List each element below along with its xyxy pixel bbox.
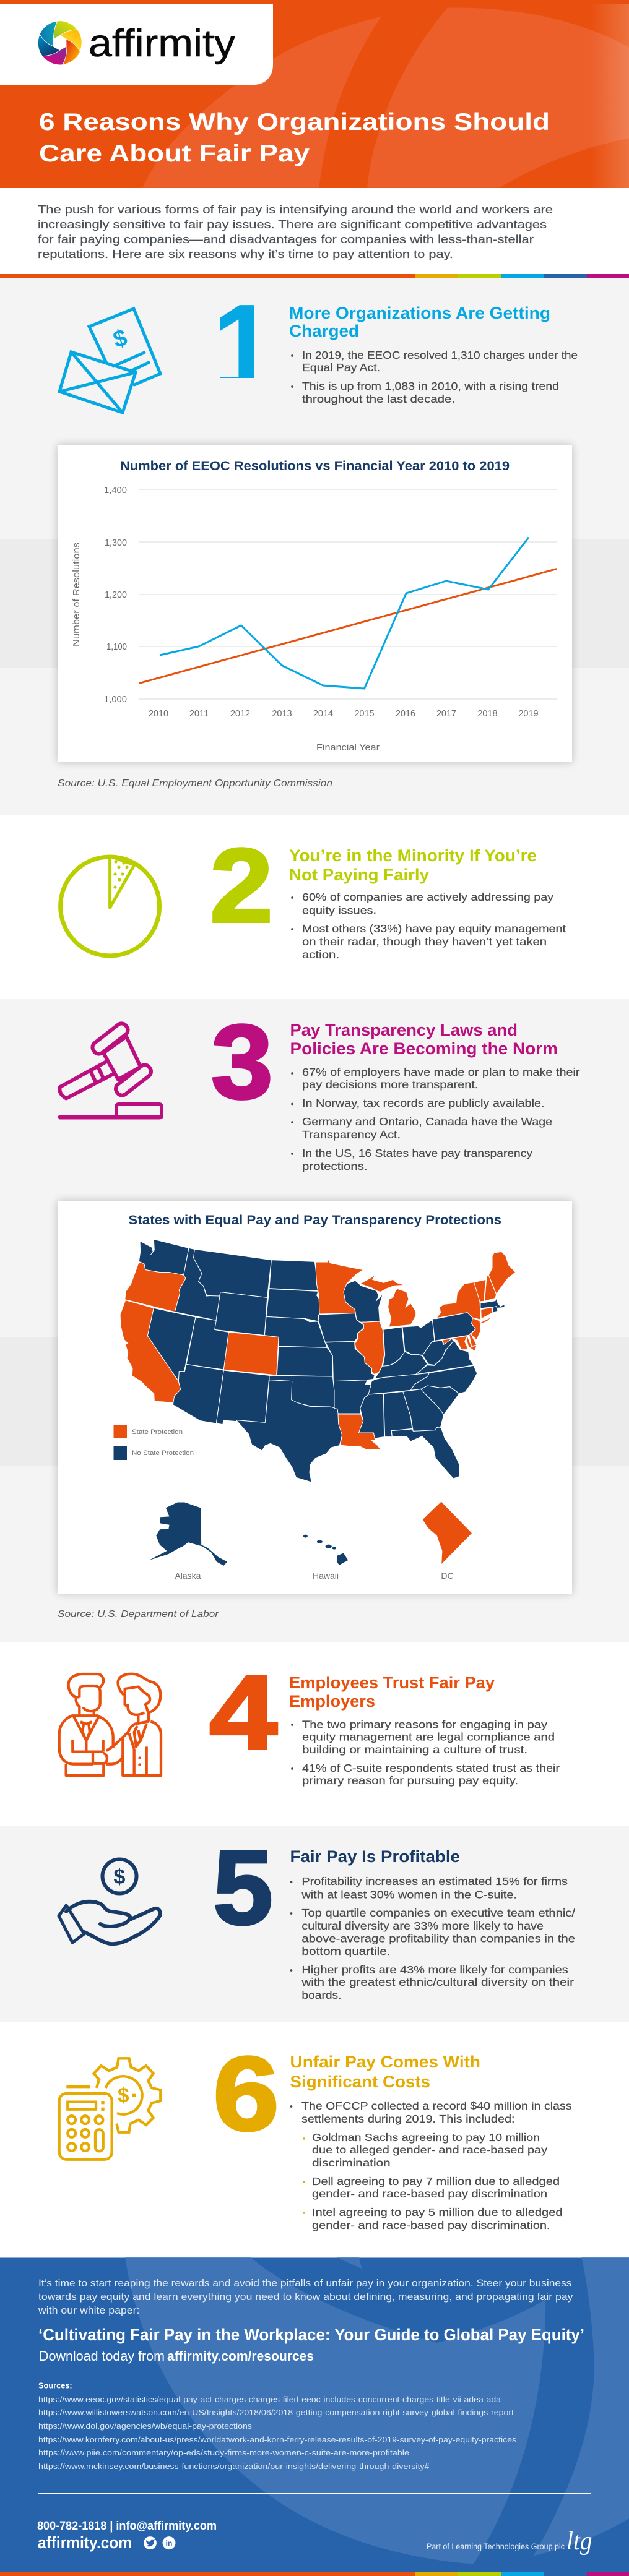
source note: Source: U.S. Department of Labor xyxy=(58,1609,219,1620)
gridlines and axes labels xyxy=(72,486,557,753)
bullet list: boards. xyxy=(301,1989,342,2001)
bullet list: 67% of employers have made or plan to make their xyxy=(302,1066,580,1078)
sources list xyxy=(38,2381,517,2471)
bullet list: 41% of C-suite respondents stated trust as their xyxy=(302,1762,560,1774)
intro text: reputations. Here are six reasons why it’s time to pay attention to pay. xyxy=(38,248,453,260)
bullet list: with the greatest ethnic/cultural diversity on their xyxy=(301,1976,574,1988)
sources list: https://www.dol.gov/agencies/wb/equal-pay-protections xyxy=(38,2421,253,2431)
icon: linkedin: in xyxy=(166,2539,172,2548)
icon: linkedin xyxy=(162,2536,176,2549)
bullet list: discrimination xyxy=(312,2157,391,2169)
bullet list: pay decisions more transparent. xyxy=(302,1078,478,1091)
colour stripe xyxy=(0,274,629,278)
sources list: Sources: xyxy=(38,2381,72,2390)
bullet list: In Norway, tax records are publicly available. xyxy=(302,1097,545,1109)
LTG credit: ltg xyxy=(566,2527,592,2556)
bullet list: bottom quartile. xyxy=(301,1945,391,1957)
download line xyxy=(39,2348,314,2364)
heading: Significant Costs xyxy=(290,2072,430,2091)
bullet list: gender- and race-based pay discrimination xyxy=(312,2187,547,2200)
logo card xyxy=(0,4,273,85)
bullet list: Top quartile companies on executive team ethnic/ xyxy=(301,1907,575,1919)
gridlines and axes labels: 1,300 xyxy=(105,538,127,548)
gridlines and axes labels: 2018 xyxy=(477,709,498,719)
intro text: increasingly sensitive to fair pay issues. There are significant competitive advantages xyxy=(38,218,547,231)
heading: You’re in the Minority If You’re xyxy=(289,846,537,865)
panel: reason 5 xyxy=(59,1829,575,2001)
map: Hawaii: Hawaii xyxy=(313,1571,339,1581)
map legend: No State Protection xyxy=(132,1449,194,1457)
bullet list: above-average profitability than companies in the xyxy=(301,1933,575,1945)
bullet list: Most others (33%) have pay equity management xyxy=(302,922,566,935)
gridlines and axes labels: 2010 xyxy=(149,709,168,719)
icon: envelope and dollar bill: $ xyxy=(111,325,130,353)
bullet list: equity issues. xyxy=(302,904,376,917)
map title: States with Equal Pay and Pay Transparency Protections xyxy=(129,1213,501,1227)
icon: gavel xyxy=(59,1021,162,1117)
map panel xyxy=(58,1201,572,1594)
gridlines and axes labels: 2013 xyxy=(272,709,292,719)
heading: Not Paying Fairly xyxy=(289,865,429,884)
heading xyxy=(289,304,550,340)
sources list: https://www.eeoc.gov/statistics/equal-pay-act-charges-charges-filed-eeoc-includes-concurrent-charges-title-vii-adea-ada xyxy=(38,2395,501,2404)
bullet list: The OFCCP collected a record $40 million in class xyxy=(301,2100,572,2112)
number 3: 3 xyxy=(211,1003,273,1121)
gridlines and axes labels: 1,200 xyxy=(105,590,127,600)
map: Alaska xyxy=(149,1502,227,1581)
download line: affirmity.com/resources xyxy=(167,2348,314,2364)
bullet list: primary reason for pursuing pay equity. xyxy=(302,1774,518,1787)
line chart panel xyxy=(58,445,572,762)
bullet list: Goldman Sachs agreeing to pay 10 million xyxy=(312,2131,540,2144)
intro text: The push for various forms of fair pay is intensifying around the world and workers are xyxy=(38,204,553,216)
call to action text xyxy=(38,2277,573,2316)
icon: two business people shaking hands xyxy=(59,1674,161,1775)
icon: aperture logo xyxy=(32,17,88,69)
intro text xyxy=(38,204,553,260)
gridlines and axes labels: 1,100 xyxy=(106,642,127,652)
number 2: 2 xyxy=(210,827,273,945)
title xyxy=(39,109,550,167)
gridlines and axes labels: 2015 xyxy=(354,709,375,719)
bullet list: on their radar, though they haven’t yet taken xyxy=(302,935,547,948)
map legend: State Protection xyxy=(132,1428,183,1436)
gridlines and axes labels: Financial Year xyxy=(316,743,380,753)
bullet list: due to alleged gender- and race-based pay xyxy=(312,2144,547,2156)
sources list: https://www.willistowerswatson.com/en-US/Insights/2018/06/2018-getting-compensation-right-survey-global-findings-report xyxy=(38,2408,514,2417)
bullet list: protections. xyxy=(302,1160,368,1172)
US map xyxy=(120,1239,516,1482)
bullet list: 60% of companies are actively addressing pay xyxy=(302,891,553,903)
heading: Charged xyxy=(289,322,359,340)
panel: header xyxy=(0,0,629,188)
sources list: https://www.piie.com/commentary/op-eds/study-firms-more-women-c-suite-are-more-profitable xyxy=(38,2448,409,2457)
panel: footer xyxy=(0,2257,629,2572)
logo wordmark: affirmity xyxy=(89,22,235,65)
panel: reason 1 xyxy=(58,279,578,789)
bullet list: with at least 30% women in the C-suite. xyxy=(301,1889,517,1901)
panel: reason 3 xyxy=(58,1003,580,1620)
bottom colour stripe xyxy=(0,2572,629,2576)
title: Care About Fair Pay xyxy=(39,140,310,167)
gridlines and axes labels: 2014 xyxy=(313,709,333,719)
title: 6 Reasons Why Organizations Should xyxy=(39,109,550,135)
heading: Employees Trust Fair Pay xyxy=(289,1673,495,1692)
bullet list xyxy=(290,2100,572,2231)
bullet list xyxy=(291,1066,580,1172)
gridlines and axes labels: 1,000 xyxy=(104,695,127,705)
gridlines and axes labels: 2017 xyxy=(436,709,456,719)
sources list: https://www.mckinsey.com/business-functions/organization/our-insights/delivering-through-diversity# xyxy=(38,2462,430,2471)
bullet list: In 2019, the EEOC resolved 1,310 charges under the xyxy=(302,349,578,361)
bullet list: Intel agreeing to pay 5 million due to alledged xyxy=(312,2206,563,2218)
contact details: 800-782-1818 | info@affirmity.com xyxy=(37,2520,217,2533)
icon: hand holding coin: $ xyxy=(114,1865,126,1889)
call to action text: towards pay equity and learn everything you need to know about defining, measuring, and propagating fair pay xyxy=(38,2291,573,2303)
map: Hawaii xyxy=(303,1535,348,1581)
heading xyxy=(289,1673,495,1711)
bullet list: Dell agreeing to pay 7 million due to alledged xyxy=(312,2175,560,2187)
chart title: Number of EEOC Resolutions vs Financial Year 2010 to 2019 xyxy=(120,458,510,473)
heading: Pay Transparency Laws and xyxy=(290,1021,518,1039)
gridlines and axes labels: 1,400 xyxy=(104,486,127,496)
bullet list: cultural diversity are 33% more likely to have xyxy=(301,1920,544,1932)
LTG credit: Part of Learning Technologies Group plc xyxy=(427,2542,565,2551)
contact details xyxy=(37,2520,217,2552)
page background bands xyxy=(0,278,629,2257)
call to action text: It’s time to start reaping the rewards and avoid the pitfalls of unfair pay in your organization. Steer your business xyxy=(38,2277,572,2289)
bullet list: throughout the last decade. xyxy=(302,393,455,405)
bullet list: In the US, 16 States have pay transparency xyxy=(302,1147,532,1159)
data line xyxy=(160,538,529,689)
map: Alaska: Alaska xyxy=(175,1571,201,1581)
icon: hand holding coin xyxy=(59,1860,160,1944)
bullet list: equity management are legal compliance and xyxy=(302,1731,555,1743)
bullet list: Germany and Ontario, Canada have the Wage xyxy=(302,1115,552,1128)
bullet list xyxy=(291,349,578,405)
number 5: 5 xyxy=(213,1829,273,1947)
bullet list: Transparency Act. xyxy=(302,1128,401,1141)
map legend xyxy=(114,1425,194,1460)
gridlines and axes labels: 2019 xyxy=(518,709,539,719)
LTG credit xyxy=(427,2527,592,2556)
map: DC xyxy=(423,1501,472,1581)
intro text: for fair paying companies—and disadvantages for companies with less-than-stellar xyxy=(38,233,534,246)
gridlines and axes labels: 2012 xyxy=(230,709,250,719)
bullet list: action. xyxy=(302,948,339,961)
bullet list: building or maintaining a culture of trust. xyxy=(302,1743,527,1756)
heading: Fair Pay Is Profitable xyxy=(290,1847,460,1866)
heading xyxy=(289,846,537,884)
call to action text: with our white paper: xyxy=(38,2304,140,2316)
bullet list: Profitability increases an estimated 15% for firms xyxy=(301,1875,568,1887)
icon: calculator and gear xyxy=(59,2058,160,2160)
panel: reason 4 xyxy=(59,1654,560,1787)
gridlines and axes labels: Number of Resolutions xyxy=(72,543,82,646)
icon: pie chart xyxy=(61,856,160,956)
download line: Download today from xyxy=(39,2348,165,2364)
heading: Unfair Pay Comes With xyxy=(290,2053,480,2071)
bullet list: settlements during 2019. This included: xyxy=(301,2113,515,2125)
gridlines and axes labels: 2011 xyxy=(189,709,209,719)
trend line xyxy=(139,569,557,683)
white paper title: ‘Cultivating Fair Pay in the Workplace: Your Guide to Global Pay Equity’ xyxy=(38,2325,584,2344)
heading: Policies Are Becoming the Norm xyxy=(290,1039,558,1058)
bullet list xyxy=(290,1875,575,2001)
bullet list: Higher profits are 43% more likely for companies xyxy=(301,1964,568,1976)
heading xyxy=(290,2053,480,2091)
bullet list: This is up from 1,083 in 2010, with a rising trend xyxy=(302,380,559,392)
heading: Employers xyxy=(289,1692,375,1711)
bullet list: gender- and race-based pay discrimination. xyxy=(312,2219,550,2231)
panel: reason 6 xyxy=(59,2035,572,2231)
sources list: https://www.kornferry.com/about-us/press/worldatwork-and-korn-ferry-release-results-of-2019-survey-of-pay-equity-practices xyxy=(38,2435,517,2444)
contact details: affirmity.com xyxy=(38,2533,132,2552)
heading xyxy=(290,1021,558,1058)
number 1: 1 xyxy=(210,279,279,416)
icon: envelope and dollar bill xyxy=(59,309,160,413)
number 4: 4 xyxy=(209,1654,277,1772)
map: DC: DC xyxy=(441,1571,454,1581)
number 6: 6 xyxy=(213,2035,279,2153)
icon: twitter xyxy=(144,2536,157,2549)
bullet list xyxy=(291,1719,560,1787)
bullet list: The two primary reasons for engaging in pay xyxy=(302,1719,547,1731)
bullet list: Equal Pay Act. xyxy=(302,361,380,374)
icon: calculator and gear: $ xyxy=(118,2084,129,2107)
heading: More Organizations Are Getting xyxy=(289,304,550,322)
bullet list xyxy=(291,891,566,961)
gridlines and axes labels: 2016 xyxy=(396,709,415,719)
source note: Source: U.S. Equal Employment Opportunity Commission xyxy=(58,778,332,789)
panel: reason 2 xyxy=(61,827,566,961)
